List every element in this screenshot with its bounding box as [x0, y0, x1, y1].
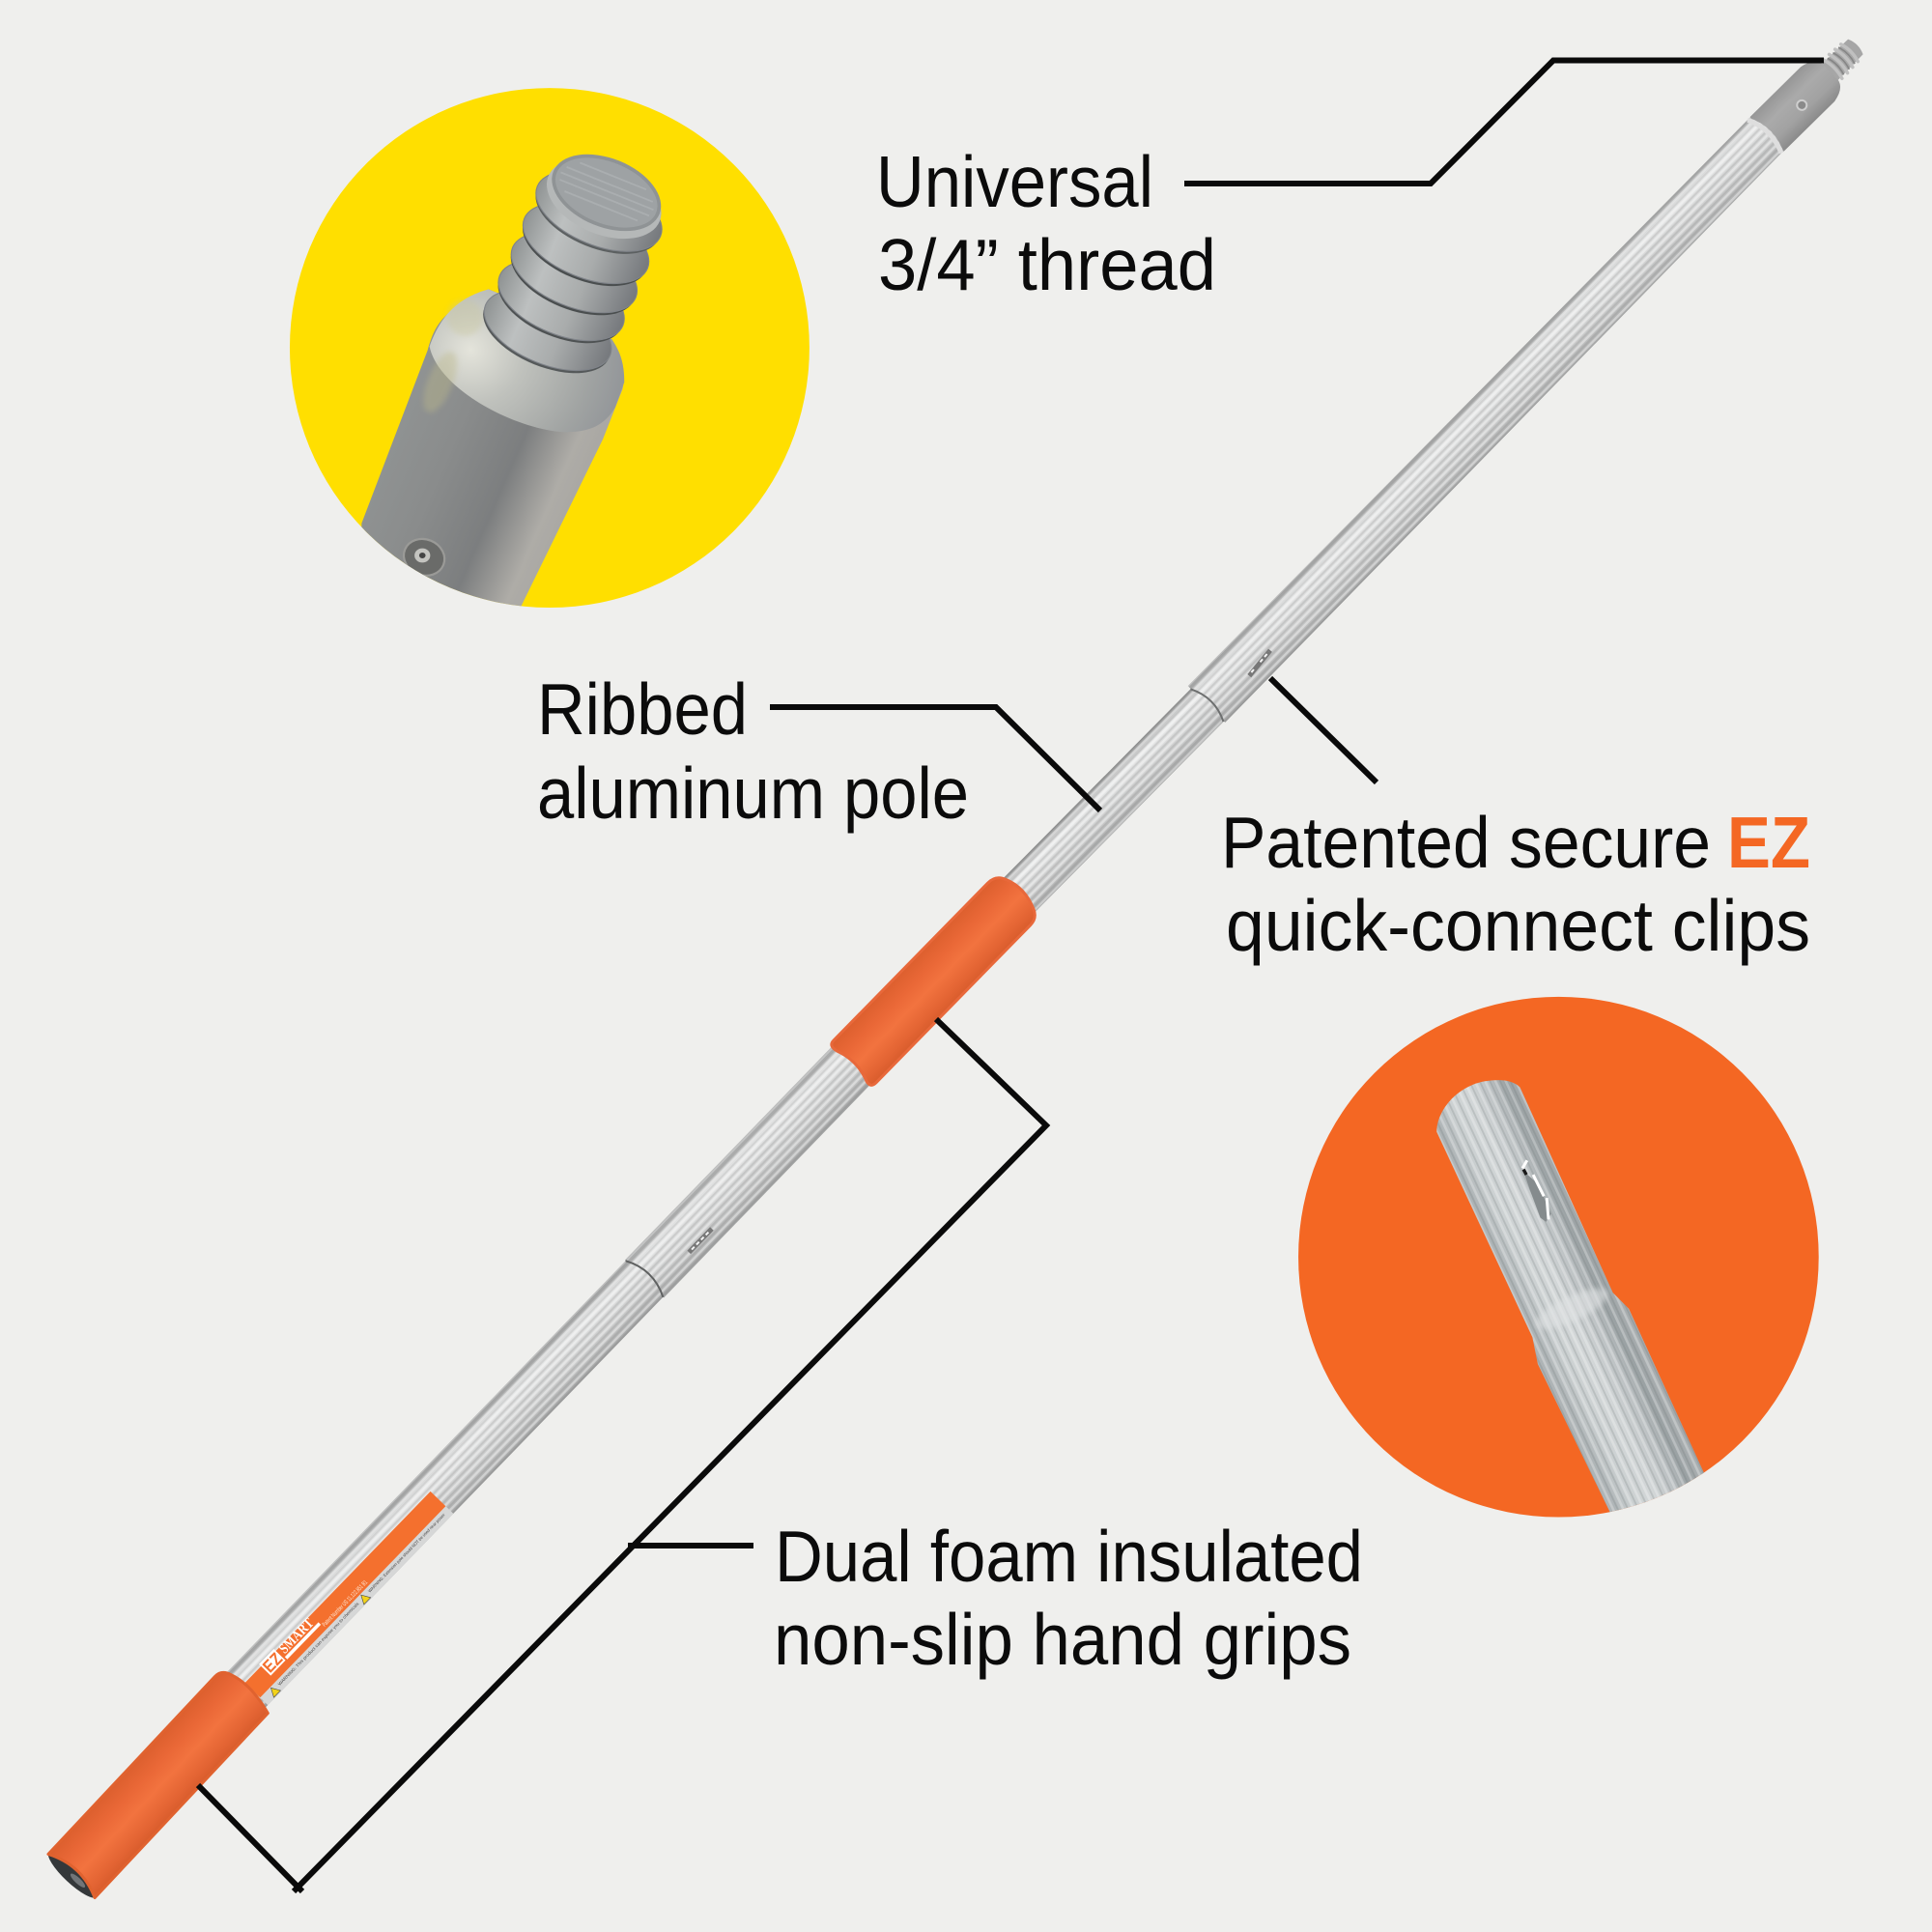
leader line: ribbed pole: [770, 707, 1100, 810]
photo: threaded tip close-up: [361, 134, 681, 611]
label: universal thread: [876, 141, 1216, 305]
label: ribbed aluminum pole: aluminum pole: [537, 753, 969, 834]
pole section: lowest tube with label: [204, 1256, 668, 1733]
pole section: threaded ferrule: [1749, 28, 1874, 152]
product label: [242, 1489, 453, 1705]
label: patented EZ clips: Patented secure: [1221, 802, 1711, 883]
pole section: upper ribbed tube: [1188, 112, 1789, 723]
label: dual foam grips: non-slip hand grips: [774, 1599, 1351, 1680]
product label: WARNING: This product can expose you to chemicals: [277, 1601, 360, 1687]
pole section: tube above lower collar: [625, 1038, 879, 1297]
product label: Patent Number US 11,122,851 B1: [321, 1579, 369, 1629]
label: universal thread: Universal: [876, 141, 1153, 222]
label: dual foam grips: [774, 1516, 1363, 1680]
photo: ribbed tube with clip: [1436, 1080, 1704, 1513]
hand grip: lower orange foam: [43, 1664, 272, 1903]
leader line: thread: [1184, 60, 1824, 184]
leader line: grip bracket: [198, 1019, 1046, 1891]
leader line: clips: [1270, 678, 1377, 782]
label: patented EZ clips: quick-connect clips: [1226, 885, 1810, 966]
label: ribbed aluminum pole: Ribbed: [537, 668, 748, 750]
product label: EZ: [259, 1649, 286, 1676]
product label: SMART: [276, 1616, 317, 1657]
hand grip: middle orange foam: [829, 869, 1043, 1087]
pole section: tube between top collar and mid grip: [979, 685, 1228, 936]
product label: WARNING: Extension pole should NOT be used near power: [367, 1512, 446, 1594]
label: patented EZ clips: [1221, 802, 1810, 966]
panel: orange circle with clip close-up: [1298, 997, 1819, 1521]
label: universal thread: 3/4” thread: [878, 224, 1216, 305]
label: ribbed aluminum pole: [537, 668, 969, 834]
label: dual foam grips: Dual foam insulated: [775, 1516, 1363, 1597]
label: patented EZ clips: EZ: [1727, 802, 1810, 883]
panel: yellow circle with thread close-up: [290, 88, 810, 611]
